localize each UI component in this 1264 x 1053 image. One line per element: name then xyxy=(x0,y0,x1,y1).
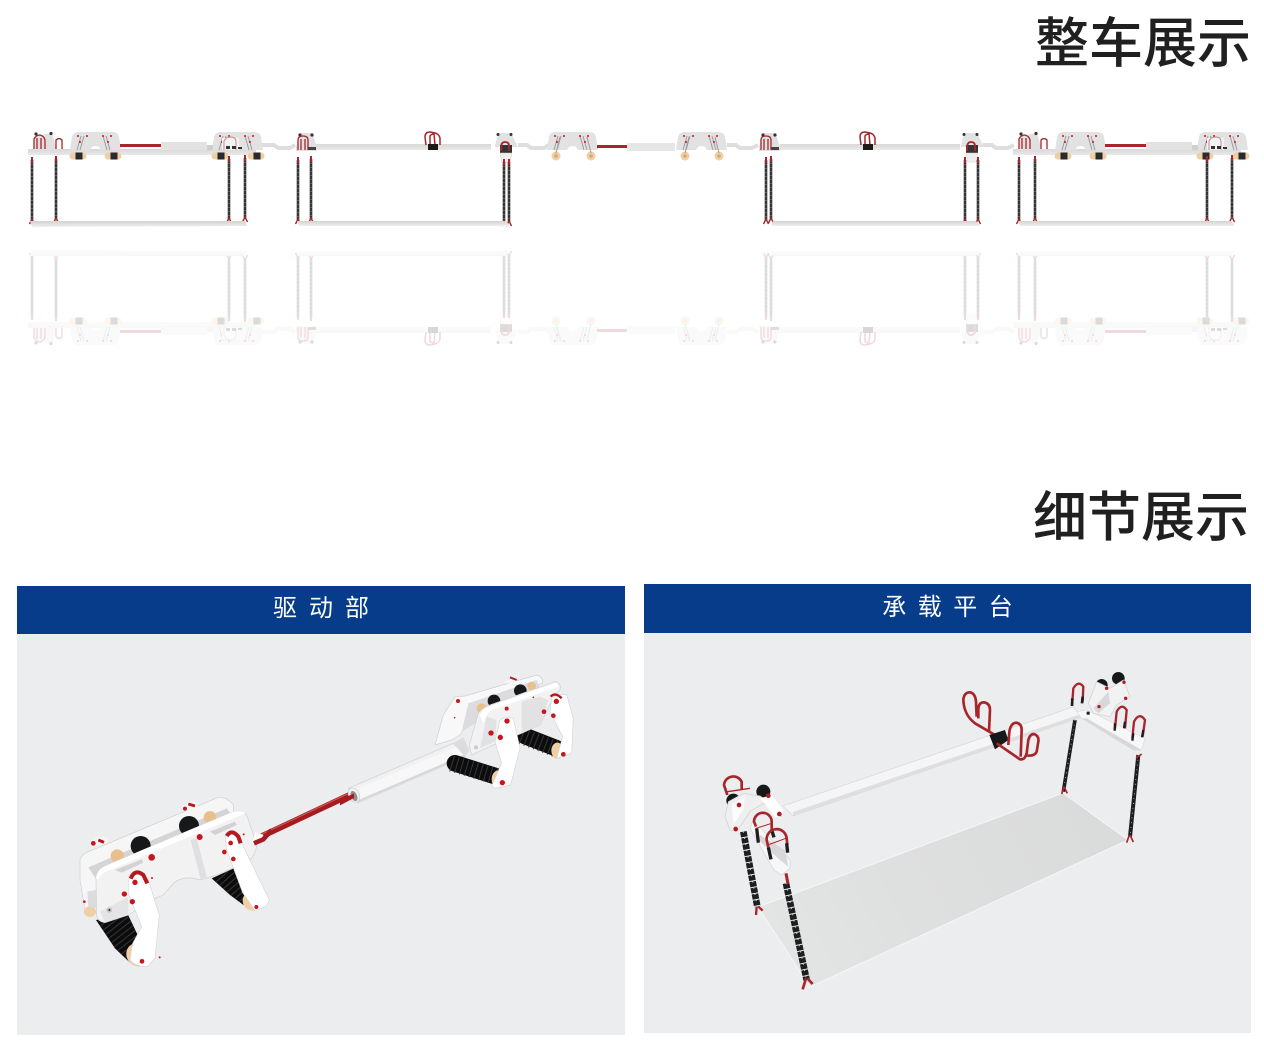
arms far xyxy=(492,717,520,788)
panel: carrying platform xyxy=(644,584,1251,1033)
red rod xyxy=(258,786,359,838)
carriage far and tube xyxy=(340,675,573,805)
front plate far xyxy=(469,682,560,755)
vehicle side view with reflection xyxy=(28,131,1250,346)
panel header: drive unit: 驱动部 xyxy=(273,595,381,622)
carriage near xyxy=(80,797,272,971)
tube xyxy=(348,743,465,803)
front plate xyxy=(96,811,257,923)
cross beam xyxy=(1077,710,1145,750)
carrying platform illustration xyxy=(644,633,1251,1033)
panel header: drive unit xyxy=(17,586,625,634)
drive unit illustration xyxy=(17,634,625,1035)
main beam xyxy=(783,707,1082,816)
panel header: carrying platform xyxy=(644,584,1251,633)
right carriage and handle xyxy=(963,672,1145,843)
arms xyxy=(128,870,159,967)
platform deck xyxy=(758,793,1128,987)
panel header: carrying platform: 承载平台 xyxy=(882,594,1024,621)
vehicle reflection xyxy=(28,250,1250,345)
left carriage xyxy=(724,776,813,989)
uprights xyxy=(1072,684,1083,702)
panel: drive unit xyxy=(17,586,625,1035)
title: whole vehicle: 整车展示 xyxy=(1035,14,1251,74)
vehicle xyxy=(28,132,1250,227)
handle xyxy=(963,692,995,735)
title: details: 细节展示 xyxy=(1033,488,1249,548)
